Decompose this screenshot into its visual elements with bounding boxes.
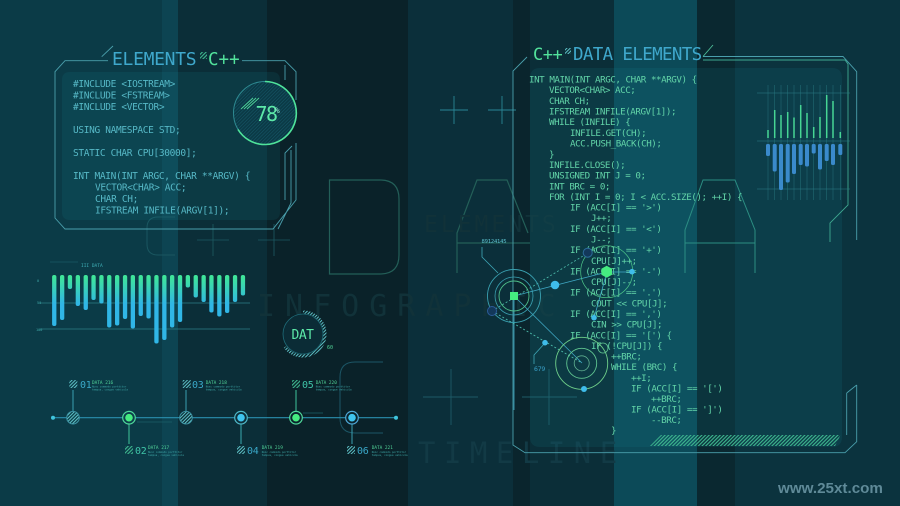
node ring B	[556, 337, 608, 389]
milestone 03: Nunc commodo porttitor	[206, 384, 240, 388]
title: ELEMENTS C++: C++	[208, 50, 240, 70]
milestone 03: 03	[192, 380, 204, 391]
milestone 05: Nunc commodo porttitor	[316, 384, 350, 388]
bar chart: left data: 0	[37, 279, 39, 283]
code block: ++BRC;	[611, 352, 642, 362]
code block: IF (ACC[I] == '>')	[570, 202, 661, 214]
bar chart: left data	[36, 262, 250, 344]
milestone 04: tempus, congue vehicula	[262, 453, 298, 457]
panel: left C++ code	[55, 46, 296, 229]
code block: INT MAIN(INT ARGC, CHAR **ARGV) {	[73, 171, 250, 182]
code block: INFILE.CLOSE();	[549, 160, 625, 171]
milestone 01: DATA 216	[92, 380, 114, 386]
right panel frame	[513, 56, 857, 453]
hatched footer band	[650, 435, 840, 446]
code block: CHAR CH;	[549, 96, 590, 107]
code block: IF (ACC[I] == '[')	[631, 384, 722, 394]
bar chart: left data: 100	[36, 328, 42, 332]
node ring A	[488, 270, 540, 322]
code block: ++I;	[631, 373, 651, 384]
milestone 06: DATA 221	[372, 445, 393, 451]
code block: IF (ACC[I] == ']')	[631, 404, 722, 416]
node labels: 679	[534, 365, 545, 373]
faint background letters and crosses: ELEMENTS	[424, 212, 559, 238]
code block: STATIC CHAR CPU[30000];	[73, 148, 196, 159]
milestone 03	[180, 380, 242, 424]
milestone 02: DATA 217	[148, 445, 170, 451]
mirrored bar chart	[757, 85, 850, 200]
milestone 01	[67, 380, 128, 424]
milestone 06: Nunc commodo porttitor	[372, 450, 406, 454]
node labels	[482, 239, 545, 373]
milestone 02: tempus, congue vehicula	[148, 453, 184, 457]
code block: CHAR CH;	[95, 194, 138, 205]
bar chart: left data: III DATA	[81, 263, 103, 269]
milestone 06: 06	[357, 446, 369, 457]
code block: WHILE (INFILE) {	[549, 117, 630, 128]
milestone 03: tempus, congue vehicula	[206, 388, 242, 392]
faint background letters and crosses: TIMELINE	[418, 436, 626, 470]
title: ELEMENTS C++	[112, 49, 240, 70]
code block: J--;	[591, 234, 611, 246]
milestone 03: DATA 218	[206, 380, 227, 386]
gauge: 78%: 78	[256, 102, 277, 126]
milestone 06: tempus, congue vehicula	[372, 453, 408, 457]
code block: INFILE.GET(CH);	[570, 128, 646, 139]
dial: DAT	[283, 312, 333, 356]
node ring C	[581, 246, 633, 298]
milestone 01: Nunc commodo porttitor	[92, 384, 127, 388]
milestone 02: 02	[135, 446, 147, 457]
code block: VECTOR<CHAR> ACC;	[549, 85, 635, 96]
faint background letters and crosses: INFOGRAPHIC	[257, 289, 566, 324]
code block: VECTOR<CHAR> ACC;	[95, 182, 186, 194]
milestone 04: 04	[247, 446, 259, 457]
code block: --BRC;	[651, 415, 682, 426]
code block: IF (ACC[I] == '[') {	[570, 330, 672, 342]
code block: #INCLUDE <FSTREAM>	[73, 90, 170, 102]
connector lines	[514, 272, 632, 410]
network diagram	[482, 239, 635, 410]
code block: IF (ACC[I] == ',')	[570, 309, 661, 320]
milestone 01: tempus, congue vehicula	[92, 388, 128, 392]
code block: J++;	[591, 213, 611, 224]
timeline axis	[53, 417, 396, 419]
code block: ACC.PUSH_BACK(CH);	[570, 138, 661, 150]
milestone 04: Nunc commodo porttitor	[262, 450, 296, 454]
milestone 05: DATA 220	[316, 380, 337, 386]
dial: DAT: DAT	[292, 328, 314, 343]
watermark: www.25xt.com	[777, 480, 883, 497]
code block: IF (ACC[I] == '+')	[570, 245, 661, 256]
milestone 05: 05	[302, 380, 314, 391]
left panel frame	[55, 46, 296, 229]
title: C++ DATA ELEMENTS: DATA ELEMENTS	[573, 45, 702, 65]
panel: right C++ code	[513, 45, 857, 453]
dial: DAT: 60	[327, 345, 333, 351]
data dots	[542, 269, 635, 392]
code block: IF (!CPU[J]) {	[591, 341, 662, 352]
code block: IFSTREAM INFILE(ARGV[1]);	[549, 106, 676, 118]
code block: #INCLUDE <IOSTREAM>	[73, 79, 176, 90]
node labels: 89124145	[482, 239, 506, 245]
code block: IF (ACC[I] == '.')	[570, 288, 661, 298]
milestone 06	[346, 411, 408, 457]
milestone 05	[290, 380, 352, 424]
code block: COUT << CPU[J];	[591, 298, 667, 310]
code block: ++BRC;	[651, 394, 682, 405]
code block: CPU[J]--;	[591, 277, 637, 288]
code block: IF (ACC[I] == '<')	[570, 224, 661, 235]
milestone 02: Nunc commodo porttitor	[148, 450, 183, 454]
faint background letters and crosses	[137, 96, 755, 470]
gauge: 78%: %	[275, 106, 280, 115]
code block	[73, 79, 250, 216]
milestone 05: tempus, congue vehicula	[316, 388, 352, 392]
milestone 01: 01	[80, 380, 92, 391]
code block: CPU[J]++;	[591, 256, 637, 267]
milestone 04	[235, 411, 298, 457]
title: ELEMENTS C++: ELEMENTS	[112, 49, 196, 70]
bar chart: left data: 50	[37, 301, 41, 305]
code block: #INCLUDE <VECTOR>	[73, 102, 165, 113]
code block: }	[549, 150, 554, 160]
code block: IF (ACC[I] == '-')	[570, 266, 661, 278]
code block: CIN >> CPU[J];	[591, 320, 662, 330]
title: C++ DATA ELEMENTS: C++	[533, 45, 562, 65]
code block: FOR (INT I = 0; I < ACC.SIZE(); ++I) {	[549, 192, 742, 203]
gauge: 78%	[234, 82, 296, 144]
milestone 04: DATA 219	[262, 445, 283, 451]
milestone 02	[123, 411, 184, 457]
code block: WHILE (BRC) {	[611, 362, 677, 373]
code block	[529, 74, 742, 436]
timeline	[51, 380, 408, 457]
code block: INT MAIN(INT ARGC, CHAR **ARGV) {	[529, 74, 697, 86]
code block: UNSIGNED INT J = 0;	[549, 170, 646, 182]
bars	[52, 275, 245, 344]
code block: USING NAMESPACE STD;	[73, 125, 180, 136]
code block: }	[611, 426, 616, 436]
code block: INT BRC = 0;	[549, 182, 610, 192]
code block: IFSTREAM INFILE(ARGV[1]);	[95, 206, 229, 216]
